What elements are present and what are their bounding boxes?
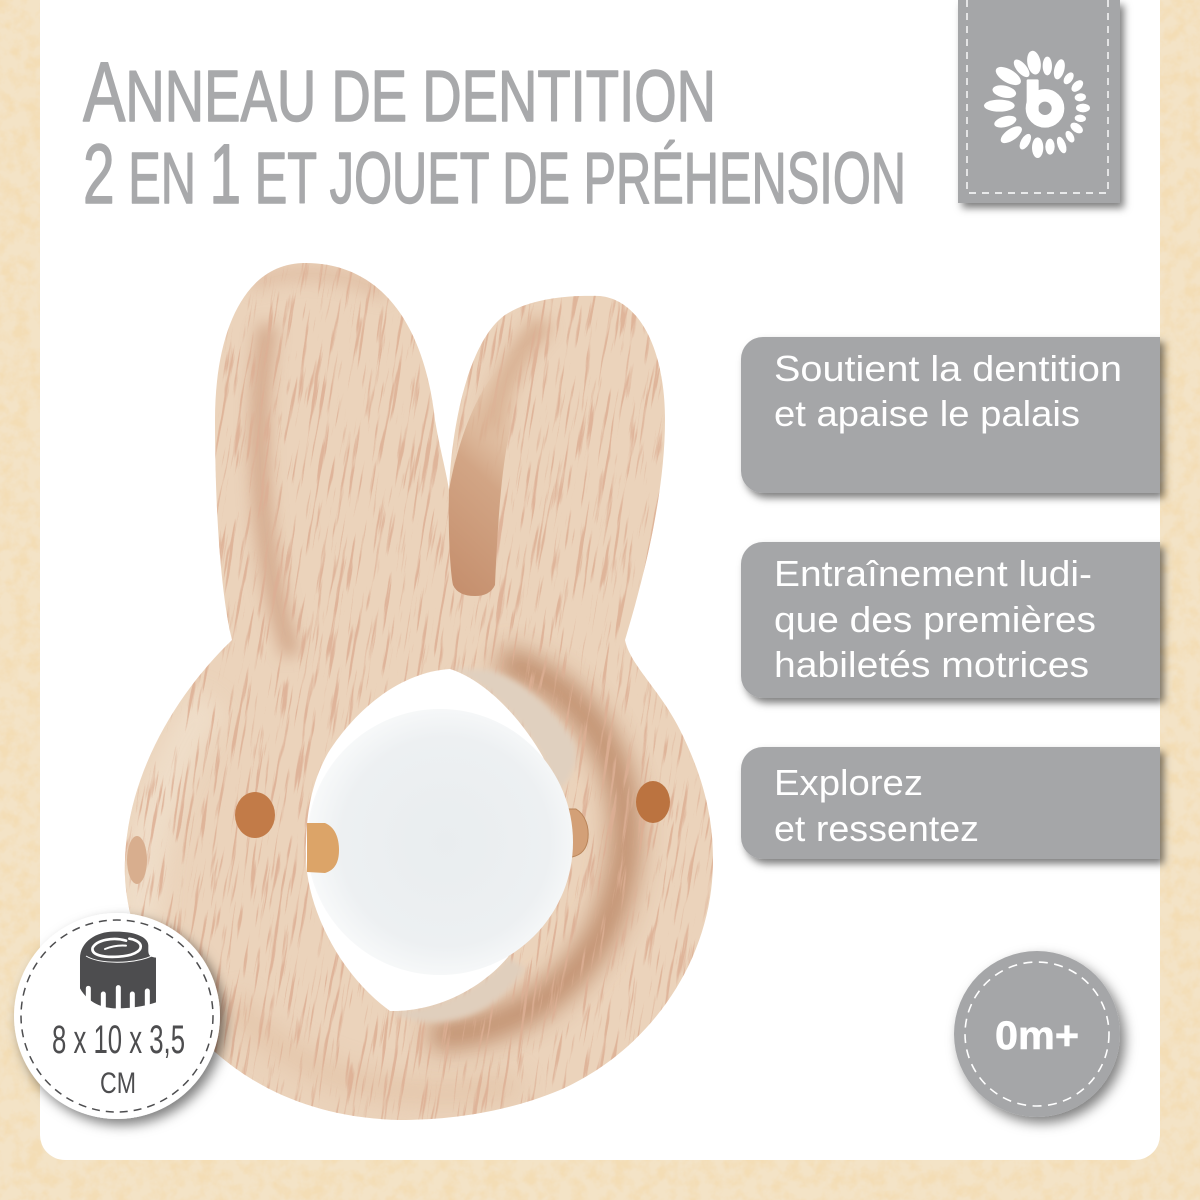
rabbit wood body xyxy=(124,263,713,1120)
inner wood face top xyxy=(450,669,576,790)
inner hole xyxy=(306,669,575,1011)
benefit text 2: Entraînement ludi- xyxy=(774,553,1092,594)
left peg xyxy=(307,823,339,873)
product photo: wooden rabbit teether xyxy=(124,263,713,1120)
benefit text 3: Explorez xyxy=(774,762,923,803)
eye left xyxy=(235,792,275,838)
benefit text 2: que des premières xyxy=(774,599,1096,640)
size text: 8 x 10 x 3,5 xyxy=(52,1018,185,1062)
benefit pill 1 xyxy=(741,337,1160,493)
inner wood face bottom xyxy=(390,957,525,1022)
age text: 0m+ xyxy=(995,1014,1079,1058)
size text xyxy=(52,1018,185,1100)
icon: tape measure roll xyxy=(80,932,156,1008)
brand tag with logo xyxy=(958,0,1120,203)
benefit text 2 xyxy=(774,553,1096,685)
stitching xyxy=(967,0,1108,193)
tag xyxy=(958,0,1120,203)
benefit text 1: Soutient la dentition xyxy=(774,348,1122,389)
eye right xyxy=(636,781,670,823)
benefit text 3 xyxy=(774,762,979,849)
benefit text 1 xyxy=(774,348,1122,434)
title line 1: ANNEAU DE DENTITION xyxy=(83,45,716,139)
benefit text 1: et apaise le palais xyxy=(774,393,1080,434)
benefit text 3: et ressentez xyxy=(774,808,979,849)
size text: CM xyxy=(100,1067,136,1100)
benefit pill 3 xyxy=(741,747,1160,859)
side dowel xyxy=(127,836,147,884)
ear slit xyxy=(449,345,530,596)
right peg xyxy=(565,809,588,857)
age badge xyxy=(954,951,1120,1117)
white ball xyxy=(307,709,573,975)
benefit pill 2 xyxy=(741,542,1160,698)
title line 2: 2 EN 1 ET JOUET DE PRÉHENSION xyxy=(83,127,906,221)
title xyxy=(83,45,906,221)
icon: brand logo xyxy=(984,50,1090,158)
benefit text 2: habiletés motrices xyxy=(774,644,1089,685)
size badge xyxy=(14,913,220,1119)
